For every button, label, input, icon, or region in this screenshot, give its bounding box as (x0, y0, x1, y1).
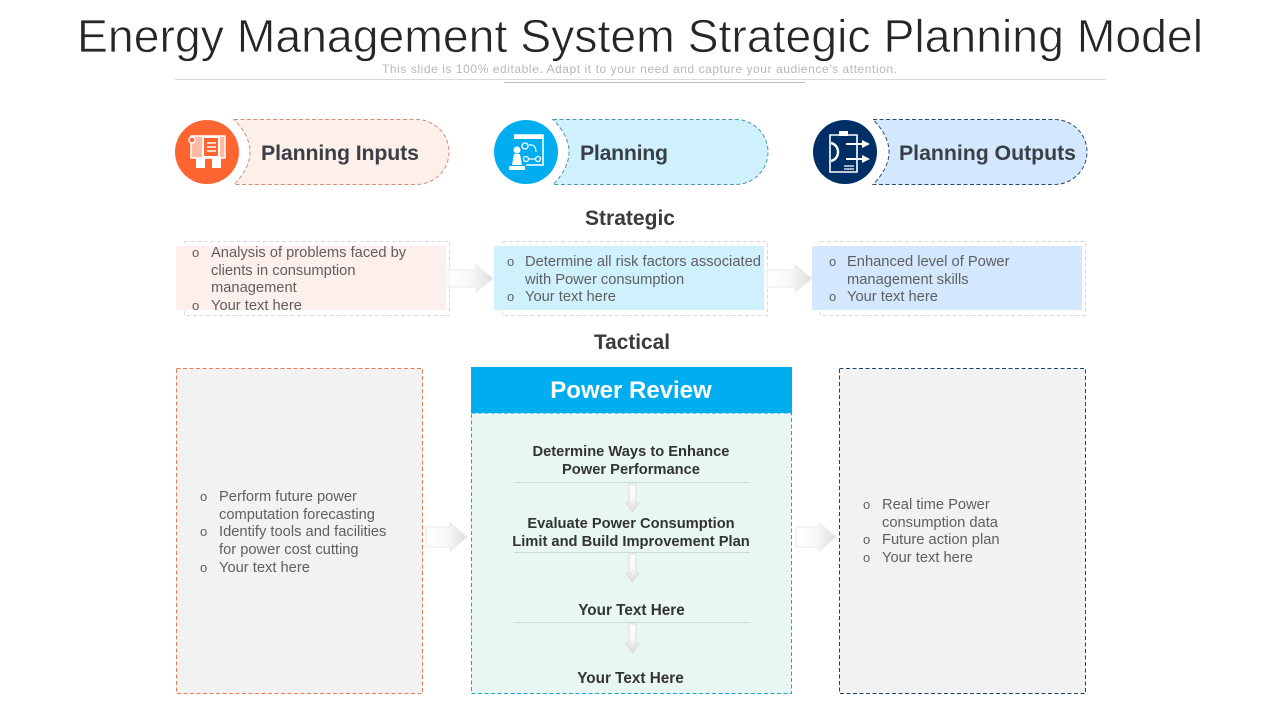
step 2: Evaluate Power Consumption (527, 516, 735, 532)
bullet list: tactical inputs: Identify tools and facilities (219, 524, 386, 540)
bullet list: tactical outputs: Your text here (882, 550, 973, 566)
step 4: Your Text Here (577, 670, 684, 687)
heading: strategic: Strategic (585, 206, 675, 230)
bullet list: strategic outputs: o (829, 254, 836, 269)
step 3: Your Text Here (578, 602, 685, 619)
bullet list: tactical inputs: o (200, 560, 207, 575)
bullet list: tactical outputs (863, 497, 1000, 566)
step 2: Limit and Build Improvement Plan (512, 534, 750, 550)
step 2 (512, 516, 750, 552)
bullet list: strategic planning: o (507, 254, 514, 269)
bullet list: tactical outputs: o (863, 497, 870, 512)
bullet list: tactical outputs: Real time Power (882, 497, 990, 513)
bullet list: strategic planning: Your text here (525, 289, 616, 305)
bullet list: strategic inputs (192, 245, 407, 314)
bullet list: tactical outputs: Future action plan (882, 532, 1000, 548)
header: power review: Power Review (550, 377, 712, 404)
bullet list: strategic inputs: o (192, 245, 199, 260)
header: power review (471, 367, 792, 413)
panel: planning outputs header (813, 120, 1087, 184)
arrow: inputs to planning (448, 265, 493, 292)
step 1: Determine Ways to Enhance (533, 444, 729, 460)
panel: tactical outputs (840, 368, 1086, 694)
bullet list: tactical inputs: for power cost cutting (219, 542, 359, 558)
bullet list: tactical inputs: o (200, 489, 207, 504)
panel: strategic inputs (176, 242, 450, 316)
arrow: step 1 to step 2 (626, 484, 639, 512)
bullet list: strategic outputs: management skills (847, 272, 969, 288)
bullet list: strategic outputs: Enhanced level of Power (847, 254, 1010, 270)
label: planning inputs: Planning Inputs (261, 141, 419, 165)
bullet list: strategic outputs: o (829, 289, 836, 304)
arrow: power review to tactical outputs (796, 523, 836, 551)
pill: planning inputs (234, 120, 449, 184)
icon: planning inputs presentation board (175, 120, 239, 184)
heading: tactical: Tactical (594, 330, 670, 354)
panel: power review (471, 367, 792, 694)
arrow: tactical inputs to power review (426, 523, 467, 551)
bullet list: strategic outputs (829, 254, 1010, 305)
panel: planning header (494, 120, 768, 184)
arrow: planning to outputs (767, 265, 812, 292)
step 1 (514, 444, 750, 482)
subtitle: This slide is 100% editable. Adapt it to your need and capture your audience's attention. (382, 62, 897, 76)
bullet list: tactical inputs: Perform future power (219, 489, 357, 505)
bullet list: tactical inputs (200, 489, 386, 576)
bullet list: strategic outputs: Your text here (847, 289, 938, 305)
panel: strategic outputs (812, 242, 1086, 316)
bullet list: tactical inputs: Your text here (219, 560, 310, 576)
bullet list: strategic planning: with Power consumption (524, 272, 684, 288)
step 1: Power Performance (562, 462, 700, 478)
bullet list: tactical inputs: o (200, 524, 207, 539)
title: Energy Management System Strategic Planning Model (77, 10, 1203, 62)
title divider (175, 80, 1106, 82)
icon: planning outputs clipboard (813, 120, 877, 184)
icon: planning chess strategy (494, 120, 558, 184)
bullet list: strategic planning: Determine all risk factors associated (525, 254, 761, 270)
bullet list: strategic planning (507, 254, 761, 305)
bullet list: strategic inputs: clients in consumption (211, 263, 356, 279)
bullet list: tactical inputs: computation forecasting (219, 507, 375, 523)
panel: tactical inputs (176, 368, 422, 694)
label: planning: Planning (580, 141, 668, 165)
bullet list: strategic planning: o (507, 289, 514, 304)
bullet list: tactical outputs: consumption data (882, 515, 999, 531)
bullet list: strategic inputs: o (192, 298, 199, 313)
pill: planning outputs (873, 120, 1087, 184)
arrow: step 2 to step 3 (626, 554, 639, 582)
pill: planning (553, 120, 768, 184)
bullet list: strategic inputs: management (211, 280, 297, 296)
arrow: step 3 to step 4 (626, 624, 639, 653)
bullet list: tactical outputs: o (863, 532, 870, 547)
bullet list: strategic inputs: Analysis of problems faced by (211, 245, 407, 261)
bullet list: strategic inputs: Your text here (211, 298, 302, 314)
panel: planning inputs header (175, 120, 449, 184)
bullet list: tactical outputs: o (863, 550, 870, 565)
panel: strategic planning (494, 242, 768, 316)
label: planning outputs: Planning Outputs (899, 141, 1076, 165)
